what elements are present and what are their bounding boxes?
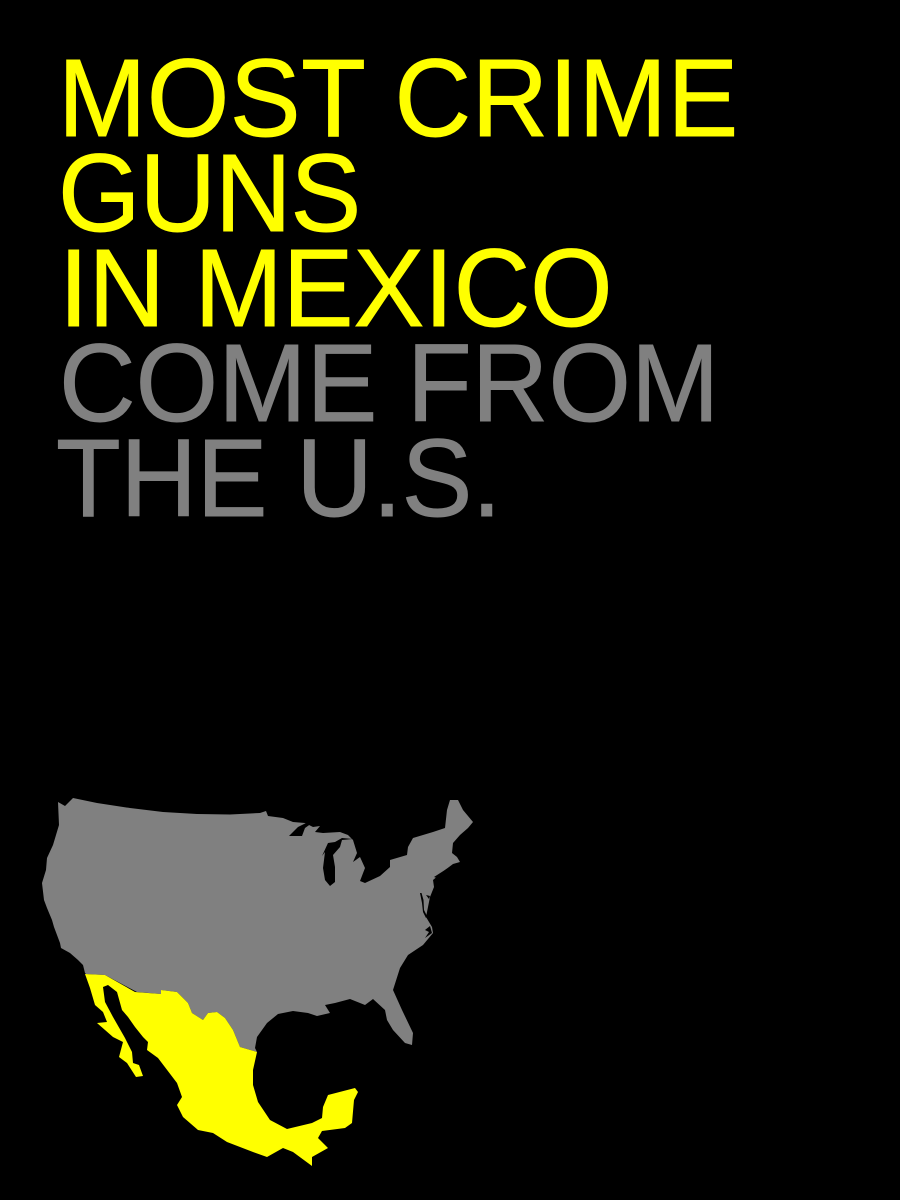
title: MOST CRIME — [58, 37, 739, 160]
title: COME FROM — [59, 322, 719, 445]
lake: Michigan — [322, 838, 353, 886]
map region: United States — [42, 798, 473, 1052]
title — [56, 37, 739, 540]
lake: Superior inlet — [289, 819, 313, 836]
title: GUNS — [58, 132, 360, 255]
title: THE U.S. — [56, 417, 501, 540]
sound: Long Island — [434, 868, 448, 878]
title: IN MEXICO — [59, 227, 613, 350]
bay: Delaware — [426, 895, 430, 899]
sound: Pamlico — [425, 926, 432, 938]
map region: Mexico — [85, 974, 358, 1166]
bay: Chesapeake — [420, 893, 427, 918]
